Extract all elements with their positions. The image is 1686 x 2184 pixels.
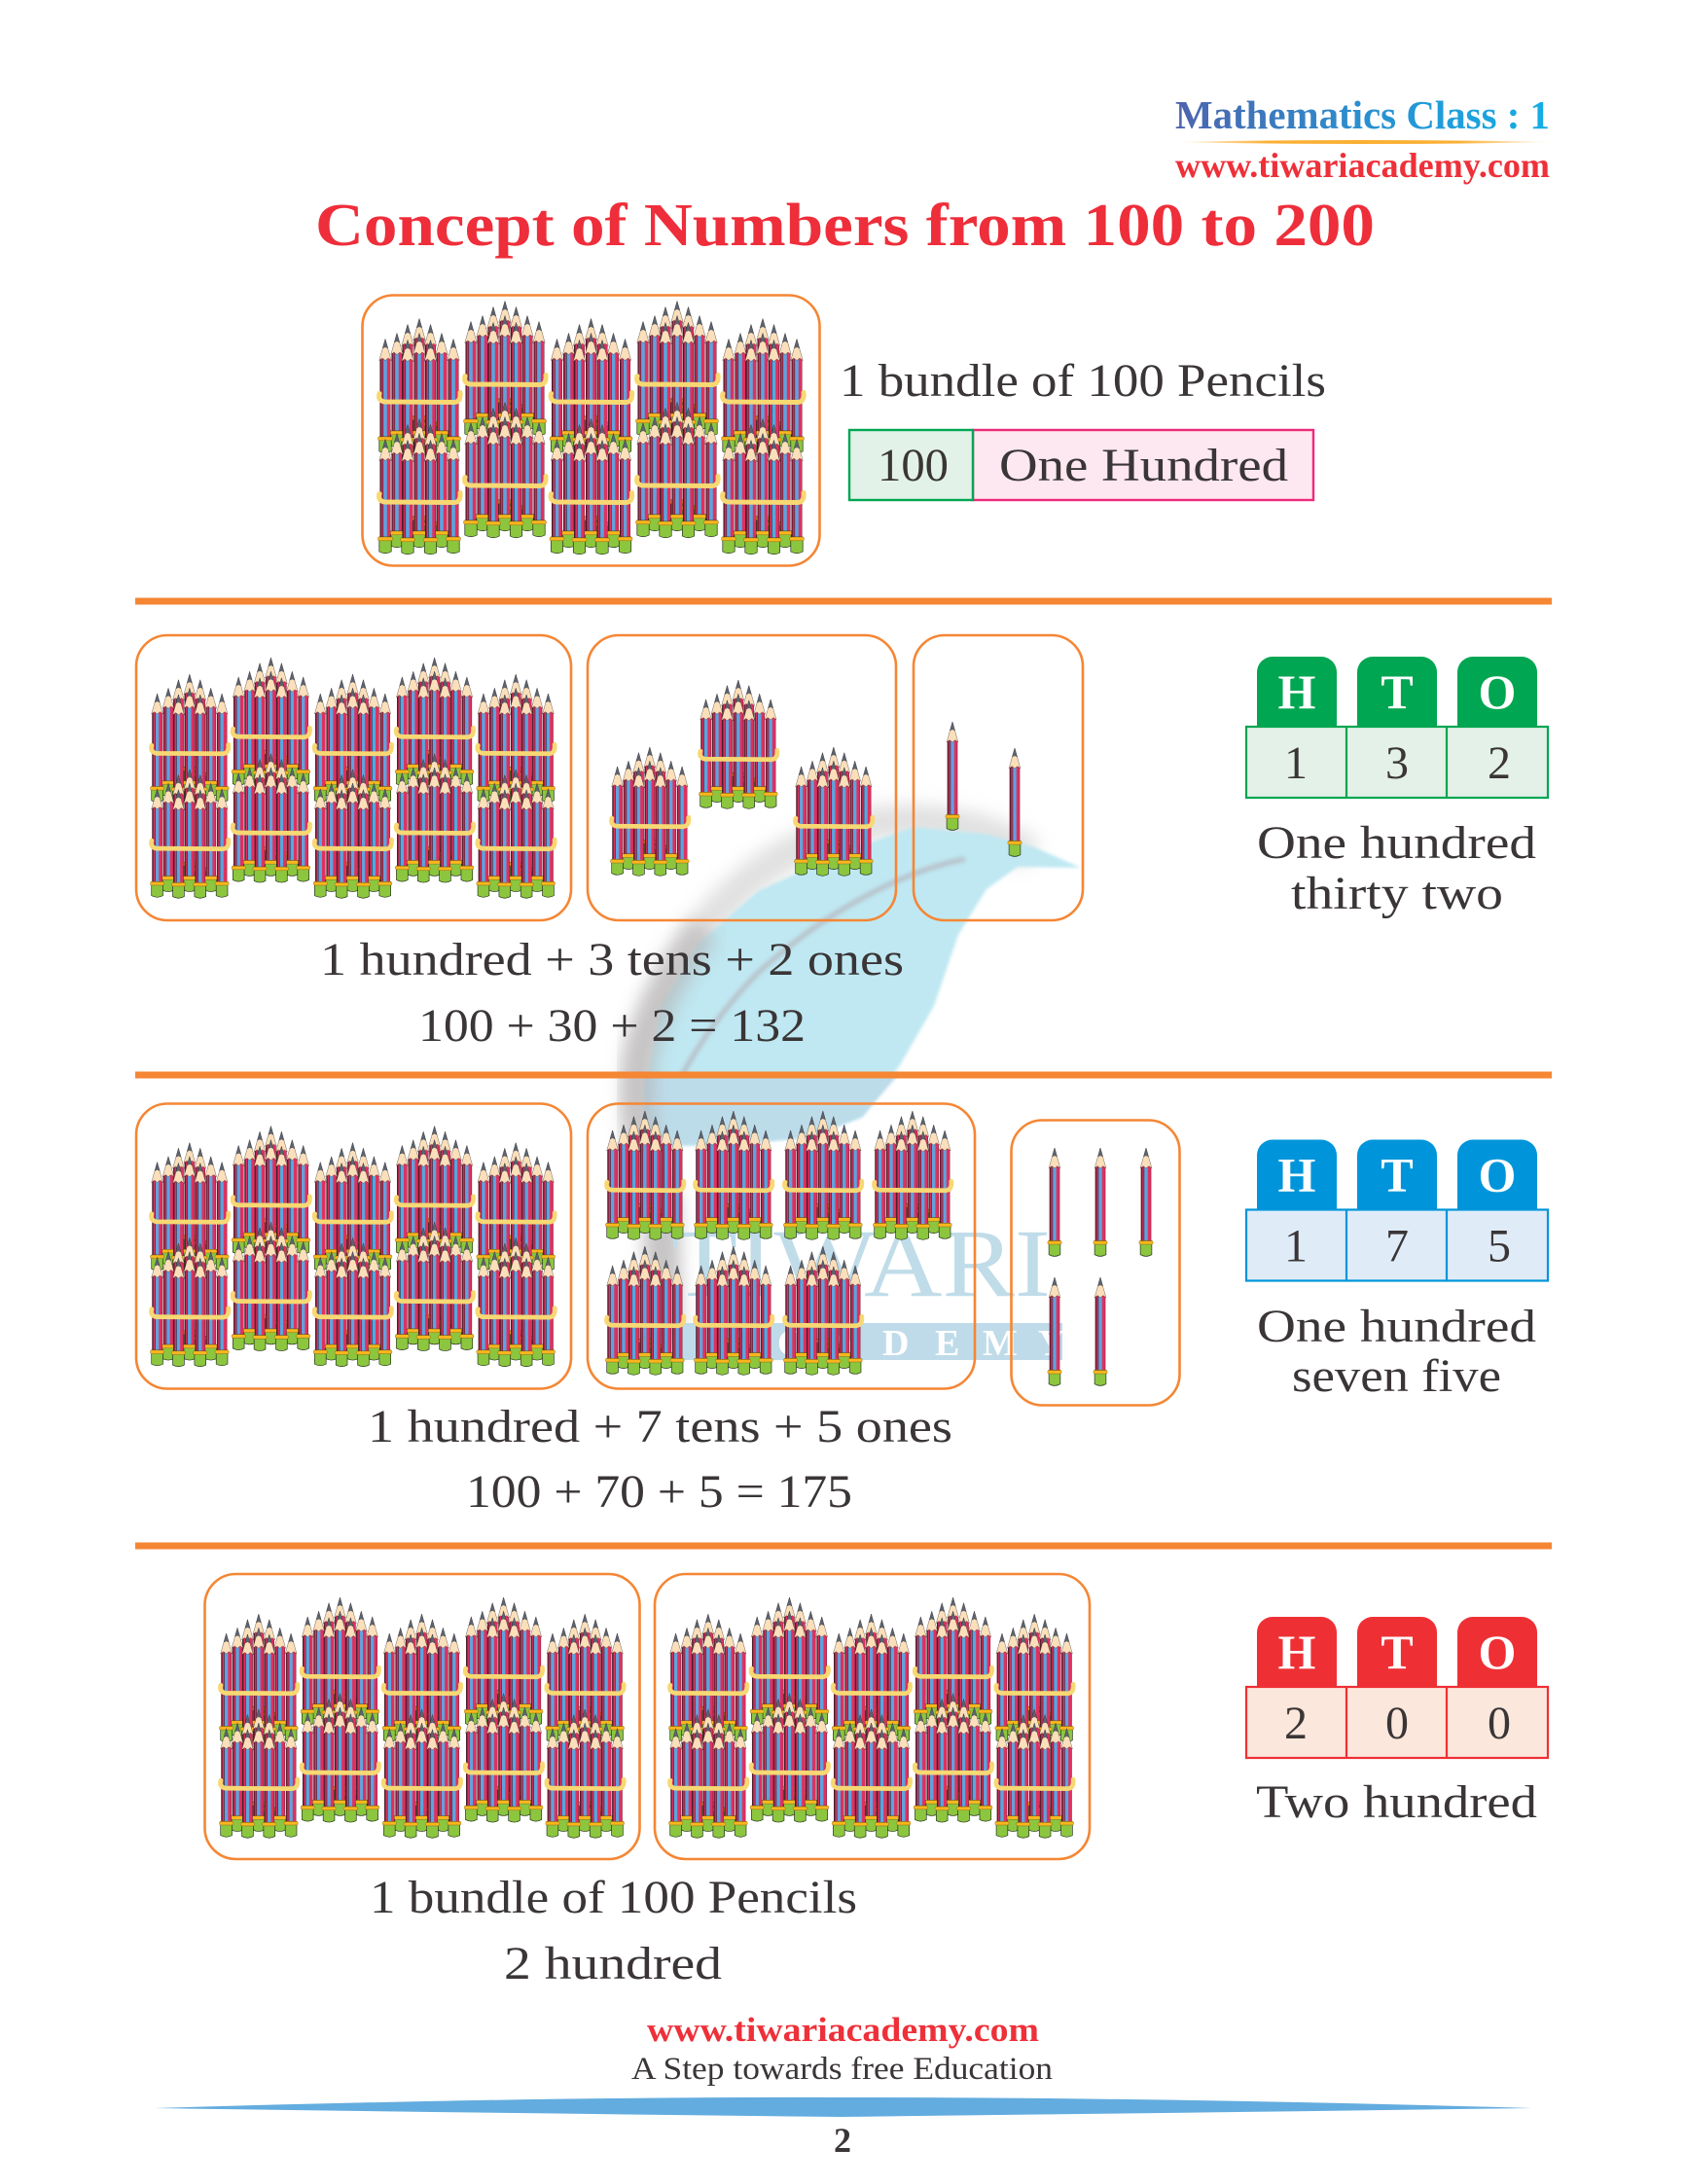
place value table: 175: T bbox=[1381, 1148, 1414, 1202]
place value table: 132: 1 bbox=[1284, 737, 1308, 789]
place value table: 175: 1 bbox=[1284, 1220, 1308, 1272]
panel: first hundred (200) bbox=[204, 1574, 640, 1859]
place value table: 132 bbox=[1246, 657, 1548, 798]
caption: 175 in words: 1 hundred + 7 tens + 5 ones bbox=[368, 1401, 952, 1452]
panel: 3 tens bbox=[588, 635, 896, 920]
divider 2 bbox=[135, 1072, 1552, 1078]
place value table: 132: O bbox=[1479, 664, 1516, 719]
place value table: 200: T bbox=[1381, 1625, 1414, 1679]
place value table: 200: 0 bbox=[1385, 1698, 1409, 1749]
caption: 2 hundred: 2 hundred bbox=[504, 1938, 722, 1989]
place value table: 175: 7 bbox=[1385, 1220, 1409, 1272]
divider 1 bbox=[135, 597, 1552, 605]
footer blue swoosh bbox=[155, 2097, 1532, 2117]
title: Concept of Numbers from 100 to 200 bbox=[315, 193, 1375, 259]
header underline bbox=[1172, 140, 1554, 144]
footer website: www.tiwariacademy.com bbox=[647, 2011, 1039, 2049]
place value table: 200: H bbox=[1278, 1625, 1316, 1679]
place value table: 200: O bbox=[1479, 1625, 1516, 1679]
divider 3 bbox=[135, 1543, 1552, 1549]
watermark: Tiwari Academy logo: TIWARI bbox=[671, 1209, 1051, 1317]
label: One hundred thirty two bbox=[1257, 817, 1536, 919]
place value table: 175 bbox=[1246, 1140, 1548, 1280]
page number: 2 bbox=[834, 2121, 851, 2160]
name box: 100 One Hundred bbox=[849, 430, 1313, 500]
place value table: 200 bbox=[1246, 1617, 1548, 1758]
footer tagline: A Step towards free Education bbox=[631, 2052, 1053, 2087]
label: One hundred thirty two: thirty two bbox=[1291, 868, 1503, 919]
panel: 1 hundred (132) bbox=[136, 635, 571, 920]
panel: 5 ones bbox=[1012, 1121, 1179, 1405]
watermark: Tiwari Academy logo bbox=[636, 821, 1081, 1364]
label: Two hundred: Two hundred bbox=[1256, 1776, 1537, 1828]
header: Mathematics Class 1: Mathematics Class : 1 bbox=[1175, 92, 1550, 137]
caption: 132 equation: 100 + 30 + 2 = 132 bbox=[418, 1000, 806, 1052]
label: One hundred thirty two: One hundred bbox=[1257, 817, 1536, 869]
caption: 132 in words: 1 hundred + 3 tens + 2 ones bbox=[320, 934, 904, 985]
caption: 175 equation: 100 + 70 + 5 = 175 bbox=[466, 1466, 852, 1518]
text: 1 bundle of 100 pencils: 1 bundle of 100 Pencils bbox=[840, 355, 1326, 407]
place value table: 175: 5 bbox=[1488, 1220, 1511, 1272]
label: One hundred seven five: One hundred bbox=[1257, 1301, 1536, 1352]
place value table: 175: H bbox=[1278, 1148, 1316, 1202]
place value table: 132: 3 bbox=[1385, 737, 1409, 789]
place value table: 200: 0 bbox=[1488, 1698, 1511, 1749]
name box: 100 One Hundred: 100 bbox=[878, 440, 949, 491]
panel: 7 tens bbox=[588, 1103, 975, 1389]
place value table: 132: H bbox=[1278, 664, 1316, 719]
panel: second hundred (200) bbox=[655, 1574, 1090, 1859]
place value table: 132: 2 bbox=[1488, 737, 1511, 789]
panel: 2 ones bbox=[914, 635, 1083, 920]
place value table: 132: T bbox=[1381, 664, 1414, 719]
header website: www.tiwariacademy.com bbox=[1175, 146, 1550, 185]
watermark: Tiwari Academy logo: ACADEMY bbox=[725, 1323, 1064, 1364]
panel: 1 hundred (175) bbox=[136, 1103, 571, 1389]
place value table: 200: 2 bbox=[1284, 1698, 1308, 1749]
panel: one hundred pencils bbox=[362, 296, 819, 566]
label: One hundred seven five bbox=[1257, 1301, 1536, 1402]
name box: 100 One Hundred: One Hundred bbox=[999, 440, 1288, 491]
place value table: 175: O bbox=[1479, 1148, 1516, 1202]
caption: 1 bundle of 100 pencils: 1 bundle of 100 Pencils bbox=[370, 1872, 857, 1923]
label: One hundred seven five: seven five bbox=[1292, 1350, 1501, 1402]
